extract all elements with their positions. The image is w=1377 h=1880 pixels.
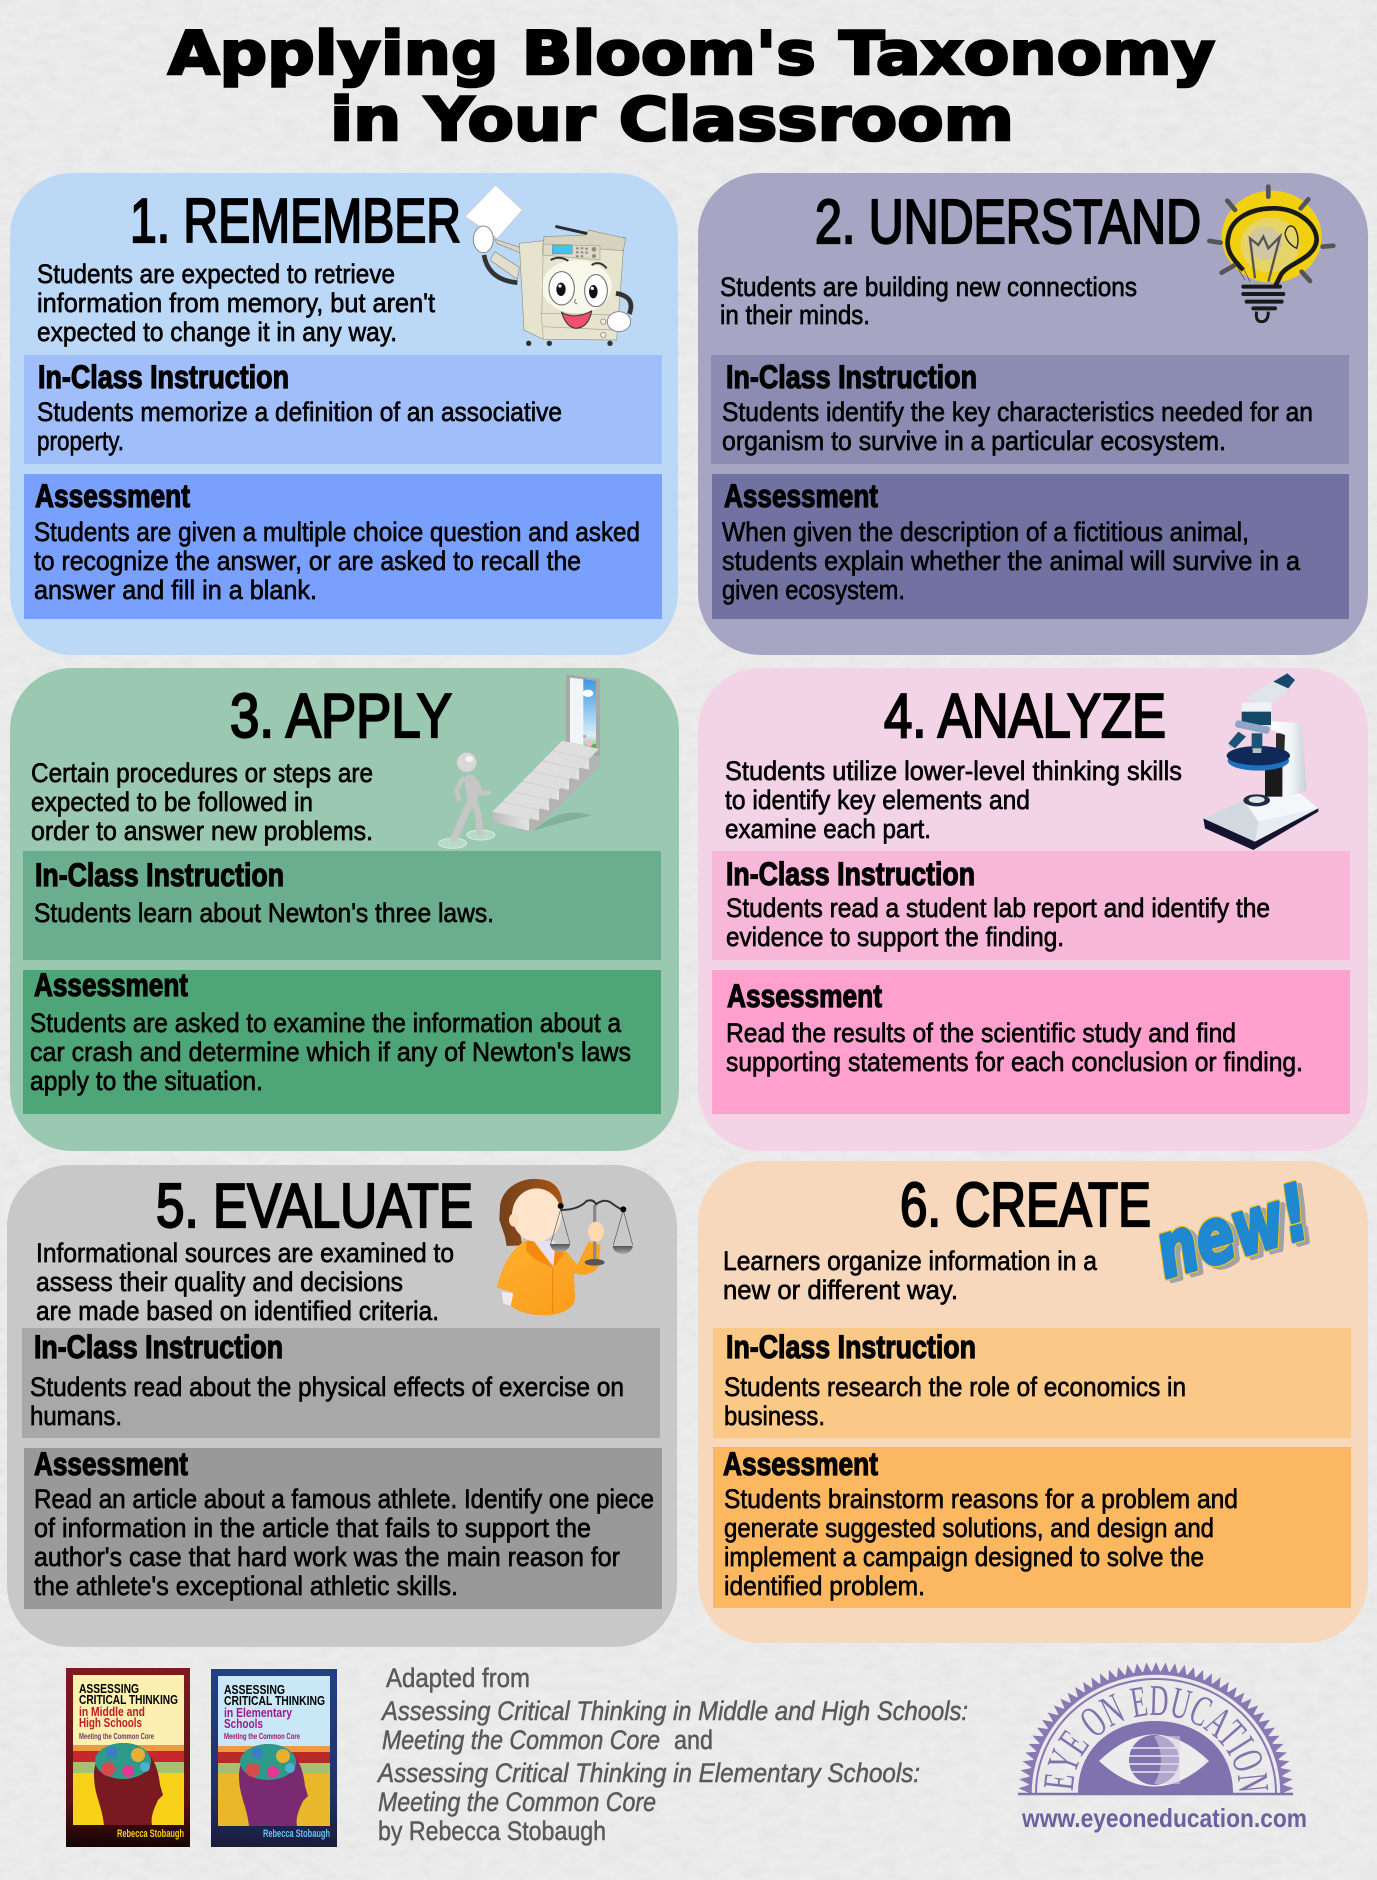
icon: stairs and figure: [439, 674, 600, 848]
box: in-class instruction: In-Class Instruction: [34, 1329, 283, 1365]
title: [168, 19, 1215, 155]
title: Applying Bloom's Taxonomy: [168, 19, 1215, 89]
box: in-class instruction: Students research the role of economics in: [724, 1372, 1186, 1402]
book cover: elementary schools: Meeting the Common Core: [224, 1732, 300, 1741]
box: in-class instruction: [23, 851, 661, 960]
box: assessment: Students are given a multiple choice question and asked: [34, 517, 640, 547]
text: apply description: Certain procedures or steps are: [31, 758, 373, 788]
book cover: middle and high schools: Rebecca Stobaugh: [117, 1828, 184, 1840]
text: analyze description: [725, 756, 1182, 844]
text: apply description: order to answer new problems.: [31, 816, 373, 846]
heading: 3. apply: 3. APPLY: [230, 682, 452, 751]
text: understand description: in their minds.: [720, 300, 870, 330]
book cover: elementary schools: in Elementary: [224, 1705, 293, 1720]
logo: eye on education: EYE ON EDUCATION: [1044, 1686, 1268, 1791]
box: assessment: given ecosystem.: [722, 575, 905, 605]
book cover: middle and high schools: High Schools: [79, 1715, 142, 1730]
box: in-class instruction: In-Class Instruction: [726, 856, 975, 892]
box: in-class instruction: organism to survive in a particular ecosystem.: [722, 426, 1226, 456]
text: adapted from credits: Assessing Critical Thinking in Middle and High Schools:: [380, 1696, 968, 1726]
box: assessment: Assessment: [34, 1446, 188, 1482]
panel: 2 understand: [698, 173, 1368, 655]
box: in-class instruction: evidence to support the finding.: [726, 922, 1064, 952]
box: assessment: [23, 967, 661, 1114]
box: in-class instruction: Students identify the key characteristics needed for an: [722, 397, 1313, 427]
box: in-class instruction: Students read about the physical effects of exercise on: [30, 1372, 624, 1402]
box: in-class instruction: In-Class Instruction: [726, 359, 977, 395]
icon: new! burst: new!: [1150, 1170, 1324, 1298]
book cover: middle and high schools: in Middle and: [79, 1704, 145, 1719]
box: assessment: the athlete's exceptional athletic skills.: [34, 1571, 458, 1601]
text: create description: new or different way.: [723, 1275, 958, 1305]
box: assessment: Assessment: [727, 978, 882, 1014]
panel: 5 evaluate: [7, 1165, 677, 1647]
panel: 4 analyze: [698, 668, 1368, 1151]
box: assessment: car crash and determine which if any of Newton's laws: [30, 1037, 631, 1067]
box: assessment: Students are asked to examine the information about a: [30, 1008, 622, 1038]
book cover: elementary schools: [211, 1669, 337, 1847]
book cover: middle and high schools: [66, 1668, 190, 1847]
box: assessment: students explain whether the animal will survive in a: [722, 546, 1301, 576]
box: in-class instruction: Students memorize a definition of an associative: [37, 397, 562, 427]
text: apply description: [31, 758, 373, 846]
text: evaluate description: Informational sources are examined to: [36, 1238, 454, 1268]
panel: 6 create: [698, 1161, 1368, 1643]
icon: microscope: [1203, 673, 1318, 850]
text: create description: [723, 1246, 1098, 1305]
text: adapted from credits: Meeting the Common Core: [378, 1787, 656, 1817]
text: remember description: Students are expected to retrieve: [37, 259, 395, 289]
box: assessment: answer and fill in a blank.: [34, 575, 317, 605]
title: in Your Classroom: [330, 85, 1014, 155]
text: adapted from credits: Meeting the Common Core: [382, 1725, 660, 1755]
box: assessment: Read the results of the scientific study and find: [726, 1018, 1236, 1048]
text: adapted from credits: by Rebecca Stobaugh: [378, 1816, 606, 1846]
text: analyze description: to identify key elements and: [725, 785, 1030, 815]
box: assessment: [712, 970, 1350, 1114]
box: in-class instruction: property.: [37, 426, 124, 456]
box: assessment: Assessment: [724, 478, 878, 514]
text: remember description: [37, 259, 435, 347]
box: assessment: [712, 474, 1349, 619]
text: evaluate description: assess their quality and decisions: [36, 1267, 403, 1297]
box: in-class instruction: In-Class Instruction: [726, 1329, 976, 1365]
box: in-class instruction: [712, 851, 1350, 960]
text: logo url: www.eyeoneducation.com: [1021, 1803, 1307, 1833]
panel: 3 apply: [10, 668, 679, 1151]
box: assessment: [24, 474, 662, 619]
box: assessment: When given the description of a fictitious animal,: [722, 517, 1249, 547]
text: remember description: information from memory, but aren't: [37, 288, 435, 318]
box: assessment: generate suggested solutions, and design and: [724, 1513, 1214, 1543]
icon: light bulb: [1209, 187, 1333, 322]
text: analyze description: examine each part.: [725, 814, 931, 844]
text: understand description: [720, 272, 1137, 330]
box: in-class instruction: [24, 355, 662, 464]
text: adapted from credits: Adapted from: [386, 1663, 530, 1693]
panel: 1 remember: [10, 173, 678, 655]
box: assessment: to recognize the answer, or are asked to recall the: [34, 546, 581, 576]
text: apply description: expected to be followed in: [31, 787, 313, 817]
box: assessment: Students brainstorm reasons for a problem and: [724, 1484, 1238, 1514]
box: assessment: author's case that hard work was the main reason for: [34, 1542, 620, 1572]
box: assessment: Assessment: [34, 967, 188, 1003]
text: adapted from credits: [376, 1663, 968, 1846]
box: assessment: Read an article about a famous athlete. Identify one piece: [34, 1484, 654, 1514]
icon: new! burst: new!: [1145, 1167, 1319, 1295]
book cover: middle and high schools: Meeting the Common Core: [79, 1732, 154, 1741]
box: assessment: of information in the article that fails to support the: [34, 1513, 591, 1543]
box: assessment: implement a campaign designed to solve the: [724, 1542, 1204, 1572]
box: in-class instruction: Students learn about Newton's three laws.: [34, 898, 494, 928]
heading: 4. analyze: 4. ANALYZE: [884, 682, 1166, 751]
box: assessment: supporting statements for each conclusion or finding.: [726, 1047, 1303, 1077]
icon: woman with scales: [497, 1179, 633, 1315]
box: assessment: Assessment: [35, 478, 190, 514]
box: in-class instruction: [22, 1328, 660, 1438]
text: adapted from credits: Assessing Critical Thinking in Elementary Schools:: [376, 1758, 920, 1788]
logo: eye on education: [1018, 1662, 1307, 1833]
heading: 2. understand: 2. UNDERSTAND: [815, 188, 1201, 257]
icon: new! burst: [1145, 1166, 1324, 1299]
text: remember description: expected to change it in any way.: [37, 317, 397, 347]
box: assessment: [713, 1446, 1351, 1608]
text: evaluate description: are made based on identified criteria.: [36, 1296, 439, 1326]
icon: new! burst: new!: [1145, 1167, 1319, 1295]
book cover: middle and high schools: CRITICAL THINKING: [79, 1692, 178, 1707]
book cover: middle and high schools: ASSESSING: [79, 1681, 139, 1696]
book cover: elementary schools: CRITICAL THINKING: [224, 1693, 325, 1708]
text: understand description: Students are building new connections: [720, 272, 1137, 302]
book cover: elementary schools: Rebecca Stobaugh: [263, 1828, 330, 1840]
box: in-class instruction: [713, 1328, 1351, 1438]
box: in-class instruction: humans.: [30, 1401, 122, 1431]
book cover: elementary schools: ASSESSING: [224, 1682, 285, 1697]
box: assessment: [24, 1446, 662, 1609]
box: assessment: identified problem.: [724, 1571, 925, 1601]
box: assessment: apply to the situation.: [30, 1066, 263, 1096]
text: evaluate description: [36, 1238, 454, 1326]
box: in-class instruction: business.: [724, 1401, 825, 1431]
box: in-class instruction: [711, 355, 1349, 464]
icon: copier character: [465, 185, 631, 346]
book cover: elementary schools: Schools: [224, 1716, 263, 1731]
text: adapted from credits: and: [674, 1725, 713, 1755]
box: in-class instruction: Students read a student lab report and identify the: [726, 893, 1270, 923]
text: analyze description: Students utilize lower-level thinking skills: [725, 756, 1182, 786]
box: assessment: Assessment: [723, 1446, 878, 1482]
heading: 1. remember: 1. REMEMBER: [130, 187, 461, 256]
heading: 6. create: 6. CREATE: [900, 1171, 1151, 1240]
heading: 5. evaluate: 5. EVALUATE: [156, 1172, 473, 1241]
text: create description: Learners organize information in a: [723, 1246, 1098, 1276]
box: in-class instruction: In-Class Instruction: [35, 857, 284, 893]
box: in-class instruction: In-Class Instruction: [38, 359, 289, 395]
